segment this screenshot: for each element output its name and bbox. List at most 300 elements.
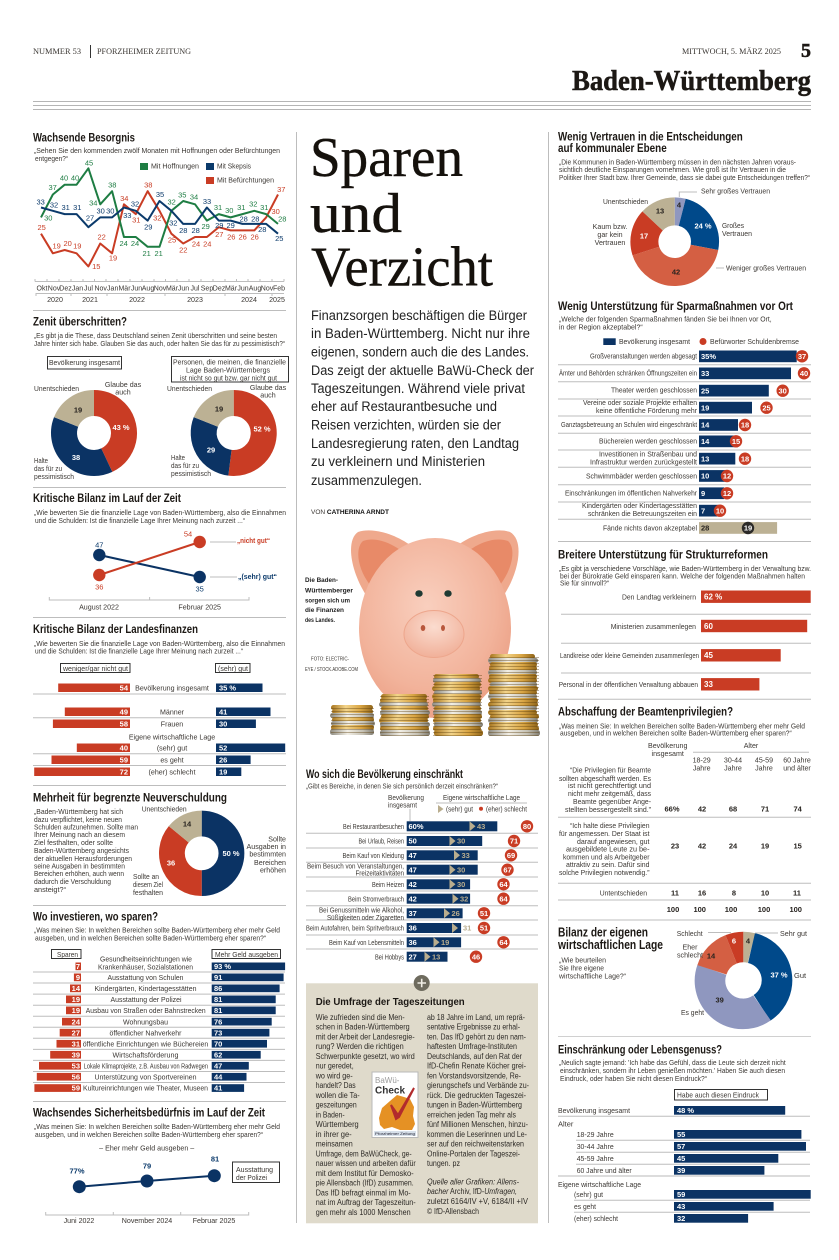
text column right <box>427 1013 529 1216</box>
line chart: 32 <box>169 218 177 227</box>
question text: Baden-Württemberg angesichts <box>34 846 129 855</box>
question <box>34 331 285 348</box>
legend: Mit Skepsis <box>217 162 251 170</box>
text column left: in ihrer ge- <box>316 1130 352 1139</box>
bar chart: 43 <box>677 1202 685 1211</box>
donut chart: schlecht <box>677 952 703 960</box>
bar chart <box>558 590 811 699</box>
line chart: 34 <box>190 192 198 201</box>
text column right: © IfD-Allensbach <box>427 1207 479 1216</box>
icon: BaWü-Check logo <box>372 1072 418 1138</box>
time axis: Mär <box>118 286 131 292</box>
diverging bar table: 39 <box>72 1050 80 1059</box>
donut chart: 6 <box>732 936 736 945</box>
diverging bar table: 44 <box>214 1072 223 1081</box>
question: Sie für sinnvoll?“ <box>560 579 609 588</box>
question <box>559 157 810 182</box>
bar table: 19 <box>219 768 227 776</box>
donut chart left: Halte <box>34 456 48 465</box>
bar table: es geht <box>160 756 184 764</box>
bar chart: Beim Kauf von Kleidung <box>342 851 404 860</box>
diverging bar table: 9 <box>76 973 80 982</box>
donut chart: Sehr großes Vertrauen <box>701 186 770 195</box>
diverging bar table: 62 <box>214 1050 222 1059</box>
bar table: 54 <box>120 684 129 692</box>
diverging bar table: 59 <box>72 1084 80 1093</box>
bar chart: 59 <box>677 1190 685 1199</box>
line chart: 25 <box>275 234 283 243</box>
question text <box>34 807 138 894</box>
donut chart: Vertrauen <box>595 239 625 247</box>
donut chart: Sollte <box>268 836 286 844</box>
heading: Wachsende Besorgnis <box>33 132 135 144</box>
donut chart: 4 <box>746 936 751 945</box>
heading: Wenig Unterstützung für Sparmaßnahmen vor Ort <box>558 301 793 313</box>
slope chart <box>49 530 277 612</box>
line chart: 33 <box>203 197 211 206</box>
line chart: 28 <box>278 215 286 224</box>
donut chart: Unentschieden <box>603 197 648 206</box>
bar chart: 32 <box>460 894 468 903</box>
legend <box>388 793 528 821</box>
diverging bar table: Kindergärten, Kindertagesstätten <box>94 984 196 993</box>
panel: Kritische Bilanz der Landesfinanzen <box>33 624 286 776</box>
image caption <box>305 577 358 673</box>
donut chart left: 38 <box>72 453 80 462</box>
table: 15 <box>794 842 802 851</box>
line chart: 30 <box>44 213 52 222</box>
text column left: meinsamen <box>316 1140 353 1149</box>
question: ausgeben, und in welchen Bereichen sollte Baden-Württemberg eher sparen?“ <box>35 1130 263 1139</box>
intro text: Das zeigt der aktuelle BaWü-Check der <box>311 363 534 378</box>
panel: Abschaffung der Beamtenprivilegien <box>558 707 811 920</box>
question <box>34 508 286 525</box>
table: Jahre <box>755 765 773 773</box>
donut chart <box>593 186 806 277</box>
time axis: 2025 <box>269 296 285 304</box>
table: 16 <box>698 888 706 898</box>
table: 60 Jahre <box>783 756 811 764</box>
bar chart: 60 <box>704 622 713 631</box>
diverging bar table: Unterstützung von Sportvereinen <box>94 1072 196 1081</box>
line chart: 30 <box>272 207 280 216</box>
line chart: 28 <box>251 214 259 223</box>
bar chart: Büchereien werden geschlossen <box>599 436 697 446</box>
question text: Ziel festhalten, oder sollte <box>34 838 113 847</box>
table: und älter <box>783 765 811 773</box>
line chart: 25 <box>38 223 46 232</box>
diverging bar table: Ausbau von Straßen oder Bahnstrecken <box>86 1006 206 1015</box>
donut chart left: Glaube das <box>105 381 142 389</box>
heading <box>558 132 743 155</box>
question: „Was meinen Sie: In welchen Bereichen sollte Baden-Württemberg eher mehr Geld <box>34 1122 280 1131</box>
line chart: 29 <box>202 222 210 231</box>
diverging bar table: 14 <box>72 984 81 993</box>
line chart: 81 <box>211 1155 219 1164</box>
donut chart: gar kein <box>597 231 623 239</box>
line chart: 26 <box>239 233 247 242</box>
text column left: nat im Auftrag der Tageszeitun- <box>316 1198 416 1207</box>
bar chart: 25 <box>762 403 771 412</box>
donut chart: 39 <box>716 996 724 1005</box>
legend <box>140 162 274 184</box>
time axis: 2021 <box>82 296 98 304</box>
line chart: 32 <box>168 198 176 207</box>
bar chart: 69 <box>507 851 515 860</box>
heading: Wenig Vertrauen in die Entscheidungen <box>558 132 743 144</box>
table: für angemessen. Der Staat ist <box>559 829 650 838</box>
time axis: Nov <box>48 286 61 292</box>
table: insgesamt <box>652 750 684 758</box>
question: „Gibt es Bereiche, in denen Sie sich persönlich derzeit einschränken?“ <box>306 782 498 790</box>
time axis: Aug <box>249 286 261 292</box>
question: „Es gibt ja die These, dass Deutschland seinen Zenit überschritten und seine besten <box>34 331 277 340</box>
text column left: pie Allensbach (IfD) zusammen. <box>316 1179 414 1188</box>
question: „Neulich sagte jemand: 'Ich habe das Gefühl, dass die Leute sich derzeit nicht <box>559 1058 786 1067</box>
bar chart: Freizeitaktivitäten <box>356 869 404 878</box>
donut chart: 36 <box>167 858 175 868</box>
bar chart: 13 <box>432 952 440 961</box>
image caption: FOTO: ELECTRIC- <box>311 656 349 662</box>
heading: Einschränkung oder Lebensgenuss? <box>558 1044 722 1056</box>
heading: wirtschaftlichen Lage <box>557 937 663 952</box>
bar table: Männer <box>160 708 185 716</box>
diverging bar table: 27 <box>72 1028 80 1037</box>
bar chart: 64 <box>499 880 508 889</box>
line chart: 28 <box>240 214 248 223</box>
slope chart: 35 <box>196 585 204 594</box>
bar chart: 42 <box>408 880 417 889</box>
bar table: 26 <box>219 756 227 764</box>
line chart: 29 <box>144 222 152 231</box>
line chart: 24 <box>192 239 200 248</box>
heading: Breitere Unterstützung für Strukturreformen <box>558 549 768 561</box>
bar chart: 37 <box>408 909 417 918</box>
heading: Die Umfrage der Tageszeitungen <box>316 996 465 1008</box>
donut chart right: auch <box>260 392 276 400</box>
heading: Wo investieren, wo sparen? <box>33 912 158 924</box>
table: 68 <box>729 805 737 814</box>
panel: Wenig Unterstützung für Sparmaßnahmen <box>558 301 811 534</box>
question: und die Schulden: Ist die finanzielle Lage Ihrer Meinung nach zurzeit ...“ <box>35 516 245 525</box>
question <box>558 955 626 980</box>
bar chart: 33 <box>462 851 470 860</box>
line chart: 31 <box>260 203 268 212</box>
bar chart: Bei Restaurantbesuchen <box>343 822 404 831</box>
text column right: fen Vorstandsvorsitzende, Re- <box>427 1071 521 1080</box>
intro text: Landesregierung raten, den Landtag <box>311 436 519 451</box>
diverging bar table: Sparen <box>57 950 78 959</box>
legend: insgesamt <box>388 801 418 810</box>
text column left: handelt? Das <box>316 1081 356 1090</box>
intro text: eher auf Restaurantbesuche und <box>311 399 497 414</box>
bar chart: schränken die Betreuungszeiten ein <box>588 509 697 518</box>
image caption: des Landes. <box>305 617 335 624</box>
donut chart: Schlecht <box>677 929 704 938</box>
question text: Schulden aufzunehmen. Sollte man <box>34 822 138 832</box>
time axis: Dez <box>213 286 226 292</box>
question: sichtlich deutliche Einsparungen vornehmen. Wie groß ist Ihr Vertrauen in die <box>559 165 786 174</box>
question: „Die Kommunen in Baden-Württemberg müssen in den nächsten Jahren voraus- <box>559 157 796 166</box>
question: Sie Ihre eigene <box>559 963 604 972</box>
bar chart: 55 <box>677 1130 685 1139</box>
line chart: 28 <box>192 226 200 235</box>
line chart: 45 <box>85 158 93 167</box>
text column left: wo wird ge- <box>315 1071 353 1080</box>
bar chart: 30 <box>457 837 465 846</box>
question: in der Region akzeptabel?“ <box>559 322 643 331</box>
bar chart: 30-44 Jahre <box>577 1142 614 1151</box>
bar chart: 12 <box>723 472 731 481</box>
question text: dazu verpflichtet, keine neuen <box>34 815 122 824</box>
table: Beamte gegenüber Ange- <box>573 797 651 806</box>
diverging bar table: Ausstattung der Polizei <box>110 995 182 1004</box>
bar chart: es geht <box>574 1202 597 1211</box>
diverging bar table: Mehr Geld ausgeben <box>215 950 278 959</box>
time axis: Nov <box>261 286 274 292</box>
donut chart left: Unentschieden <box>34 384 79 393</box>
bar chart: Ministerien zusammenlegen <box>611 622 696 631</box>
bar chart: Beim Stromverbrauch <box>348 894 404 903</box>
text column left: Wie zufrieden sind die Men- <box>316 1013 405 1022</box>
diverging bar table: Lokale Klimaprojekte, z.B. Ausbau von Radwegen <box>84 1061 208 1070</box>
line chart: 35 <box>156 190 164 199</box>
page header: MITTWOCH, 5. MÄRZ 2025 <box>682 47 781 56</box>
bar chart <box>558 1106 811 1223</box>
bar chart: 51 <box>480 924 488 933</box>
diverging bar table: 81 <box>214 1006 222 1015</box>
question: „Was meinen Sie: In welchen Bereichen sollte Baden-Württemberg eher mehr Geld <box>34 926 280 935</box>
donut chart right: 19 <box>215 404 223 414</box>
table: solche Privilegien notwendig.” <box>559 868 650 877</box>
line chart: 24 <box>120 239 128 248</box>
diverging bar table: Krankenhäuser, Sozialstationen <box>98 962 193 971</box>
bar table: Bevölkerung insgesamt <box>135 684 209 692</box>
bar chart: Investitionen in Straßenbau und <box>599 450 697 458</box>
bar chart: Personal in der öffentlichen Verwaltung abbauen <box>559 680 698 689</box>
table: 30-44 <box>724 756 742 764</box>
donut chart: Eher <box>683 943 698 951</box>
bar chart: Landkreise oder kleine Gemeinden zusammenlegen <box>560 651 699 660</box>
line chart: 28 <box>258 225 266 234</box>
question text: Bereichen erhöhen, auch wenn <box>34 869 124 878</box>
donut chart right: das für zu <box>171 461 199 470</box>
bar table: (eher) schlecht <box>149 768 195 776</box>
heading: Zenit überschritten? <box>33 317 127 329</box>
text column right: gierungschefs und Verbände zu- <box>427 1081 529 1090</box>
question: „Was meinen Sie: In welchen Bereichen sollte Baden-Württemberg eher mehr Geld <box>559 721 805 730</box>
bar chart: 30 <box>779 386 787 395</box>
question: bei der Bürokratie Geld einsparen kann. Welche der folgenden Maßnahmen halten <box>560 571 805 580</box>
line chart: 32 <box>153 214 161 223</box>
heading: Bilanz der eigenen <box>558 925 648 940</box>
box label <box>232 1162 280 1182</box>
line chart: 40 <box>71 173 79 182</box>
text column right: ten. Das IfD gehört zu den nam- <box>427 1032 526 1042</box>
text column left <box>315 1013 416 1217</box>
table: 24 <box>729 842 738 851</box>
bar chart: 18 <box>741 454 749 463</box>
bar chart: Vereine oder soziale Projekte erhalten <box>583 398 697 407</box>
donut chart: 42 <box>672 268 680 277</box>
diverging bar table: öffentlicher Nahverkehr <box>110 1028 182 1037</box>
question text: Ihrer Meinung nach an diesem <box>34 830 125 839</box>
bar table: 30 <box>219 720 227 728</box>
donut chart: 13 <box>656 207 664 216</box>
bar chart: 15 <box>732 437 740 446</box>
question <box>34 146 280 163</box>
bar chart: 18 <box>741 421 749 430</box>
heading: Kritische Bilanz der Landesfinanzen <box>33 624 198 636</box>
diverging bar table: Kultureinrichtungen wie Theater, Museen <box>83 1084 208 1093</box>
headline <box>310 127 493 298</box>
donut chart: 37 % <box>770 971 788 980</box>
donut chart left: 43 % <box>112 423 130 432</box>
line chart: 27 <box>215 230 223 239</box>
text column right: tungen. pz <box>427 1159 460 1168</box>
panel: Die Umfrage der Tageszeitungen <box>306 975 538 1223</box>
question: „Welche der folgenden Sparmaßnahmen fänden Sie bei Ihnen vor Ort, <box>559 315 772 324</box>
line chart: 31 <box>73 203 81 212</box>
question: entgegen?“ <box>35 154 68 163</box>
donut chart right: Unentschieden <box>167 384 212 393</box>
slope chart: Februar 2025 <box>178 604 221 612</box>
donut chart: Großes <box>722 221 744 230</box>
table: nicht mehr zeitgemäß, dass <box>568 789 651 798</box>
donut chart: Unentschieden <box>142 805 187 814</box>
text column right: zuletzt 6164/IV +V, 6184/II +IV <box>427 1197 529 1206</box>
table: 8 <box>732 888 736 898</box>
box label 2: Personen, die meinen, die finanzielle <box>173 358 286 366</box>
diverging bar table: 53 <box>72 1061 80 1070</box>
time axis: Nov <box>94 286 107 292</box>
time axis: 2022 <box>129 296 145 304</box>
donut chart: Vertrauen <box>722 229 752 238</box>
question text: seine Ausgaben in bestimmten <box>34 862 125 870</box>
bar chart: 57 <box>677 1142 685 1151</box>
line chart: 38 <box>144 180 152 189</box>
diverging bar table: 76 <box>214 1017 222 1026</box>
line chart <box>35 158 286 304</box>
donut chart left: auch <box>115 388 131 396</box>
line chart: November 2024 <box>122 1217 172 1225</box>
image caption: sorgen sich um <box>305 598 350 604</box>
box label 2 <box>172 356 288 382</box>
bar chart: 39 <box>677 1166 685 1175</box>
panel: Zenit überschritten <box>33 317 288 481</box>
line chart: 21 <box>155 249 163 258</box>
bar chart: 71 <box>510 837 518 846</box>
bar chart: Ämter und Behörden schränken Öffnungszeiten ein <box>559 368 697 378</box>
question: Politiker Ihrer Stadt bzw. Ihrer Gemeinde, dass sie dabei gute Entscheidungen treffen?“ <box>559 173 810 182</box>
bar chart: 19 <box>441 938 449 947</box>
line chart: 30 <box>106 207 114 216</box>
image: piggy bank with coins <box>330 530 540 736</box>
donut chart: Kaum bzw. <box>593 223 627 231</box>
donut chart left: 19 <box>74 406 82 414</box>
bar table: Frauen <box>161 720 183 728</box>
bar chart: Einschränkungen im öffentlichen Nahverkehr <box>565 488 697 498</box>
box label <box>48 356 122 369</box>
time axis: 2020 <box>47 296 63 304</box>
slope chart: „nicht gut“ <box>237 536 270 545</box>
bar table <box>33 664 286 776</box>
time axis: Sep <box>201 286 213 292</box>
bar table: (sehr) gut <box>157 744 187 752</box>
text column left: nur geredet, <box>316 1062 354 1071</box>
diverging bar table: 56 <box>72 1072 80 1081</box>
question text: dadurch die Verschuldung <box>34 877 111 886</box>
bar chart: Beim Autofahren, beim Spritverbrauch <box>306 924 404 933</box>
time axis: Jan <box>72 286 83 292</box>
text column right: IfD-Chefin Renate Köcher grei- <box>427 1062 526 1071</box>
donut chart left <box>34 381 142 481</box>
text column left: in Baden- <box>316 1110 345 1119</box>
panel: Einschränkung oder Lebensgenuss <box>558 1044 811 1223</box>
bar chart: 19 <box>701 403 709 412</box>
bar chart: 45-59 Jahre <box>577 1154 614 1163</box>
question <box>559 1058 786 1083</box>
line chart: 21 <box>143 249 151 258</box>
line chart: 19 <box>73 242 81 251</box>
bar table: 35 % <box>219 684 236 692</box>
bar chart: Ganztagsbetreuung an Schulen wird eingeschränkt <box>561 420 698 429</box>
donut chart: Sollte an <box>133 872 159 881</box>
bar chart: (eher) schlecht <box>574 1214 619 1223</box>
question <box>34 926 280 943</box>
question: Eindruck, oder haben Sie nicht diesen Eindruck?“ <box>560 1074 707 1083</box>
diverging bar table: 7 <box>76 962 80 971</box>
donut chart right <box>167 384 287 478</box>
icon: BaWü-Check logo: Check <box>375 1086 405 1096</box>
panel: Wenig Vertrauen <box>558 132 810 277</box>
time axis: Aug <box>142 286 154 292</box>
bar table: 52 <box>219 744 227 752</box>
table: 100 <box>725 905 737 914</box>
time axis: 2024 <box>241 296 257 304</box>
table: Alter <box>744 742 759 750</box>
diverging bar table: 47 <box>214 1061 222 1070</box>
bar chart: 12 <box>723 489 731 498</box>
slope chart: „(sehr) gut“ <box>238 572 277 581</box>
line chart: 20 <box>64 239 72 248</box>
text column right: fünf Millionen Menschen, hinzu- <box>427 1120 528 1129</box>
bar chart: 80 <box>523 822 531 831</box>
bar chart: 62 % <box>704 592 722 602</box>
text column right: Quelle aller Grafiken: Allens- <box>427 1178 519 1186</box>
panel: Mehrheit für begrenzte Neuverschuldung <box>33 793 286 897</box>
bar chart: 51 <box>480 909 488 918</box>
bar chart: Bei Genussmitteln wie Alkohol, <box>319 906 404 914</box>
bar chart: 10 <box>716 506 724 515</box>
bar chart: 18-29 Jahre <box>577 1130 614 1139</box>
table <box>558 742 811 920</box>
table: Jahre <box>693 765 711 773</box>
time axis: Dez <box>59 286 72 292</box>
text column right: haftesten Umfrage-Instituten <box>427 1042 517 1051</box>
table: kommen und als Arbeitgeber <box>563 852 650 862</box>
line chart: 31 <box>237 203 245 212</box>
line chart: 28 <box>179 226 187 235</box>
time axis: Feb <box>273 286 285 292</box>
bar chart: Den Landtag verkleinern <box>622 592 696 602</box>
time axis: Jun <box>178 286 189 292</box>
panel: Wachsendes Sicherheitsbedürfnis <box>33 1108 280 1225</box>
line chart: 19 <box>53 242 61 251</box>
diverging bar table: 81 <box>214 995 222 1004</box>
line chart: 33 <box>123 211 131 220</box>
legend: Befürworter Schuldenbremse <box>710 337 799 346</box>
